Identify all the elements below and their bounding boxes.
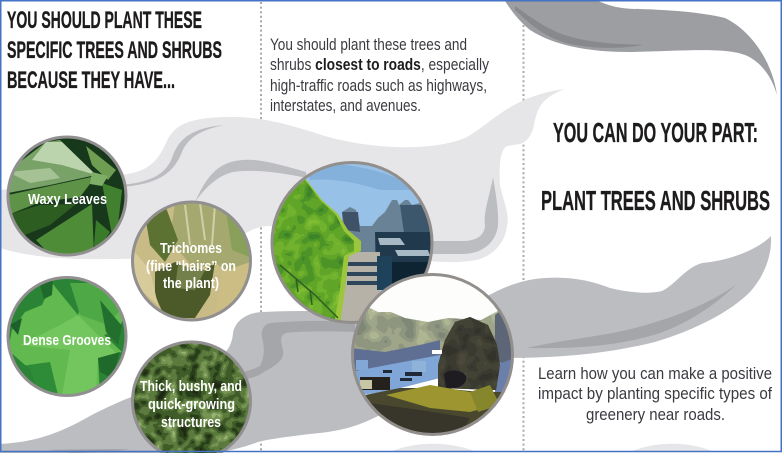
circle: thick bushy structures [130,340,255,453]
panel dividers [261,2,524,452]
heading: left panel: BECAUSE THEY HAVE... [7,67,175,94]
lower-left grey swoosh [0,311,380,453]
top-right swoosh inner stripe [515,6,643,48]
lower-right swoosh inner stripe [527,284,737,348]
photo circle: street with greenery [268,160,435,330]
text block: closest to roads: You should plant these trees and [270,35,467,54]
circle: dense grooves [5,275,130,400]
label: thick bushy structures: Thick, bushy, and [140,378,242,395]
photo circle: highway with trees [350,272,515,437]
bottom light grey curves [390,444,714,452]
medium grey stripe: upper left [122,125,224,187]
label: dense grooves: Dense Grooves [23,332,111,349]
lower-right grey swoosh [480,236,771,358]
label: trichomes: Trichomes [160,240,222,257]
heading: left panel [7,7,222,94]
label: thick bushy structures [140,378,242,431]
medium grey stripe: right of road photo [425,177,498,254]
text block: learn how: greenery near roads. [586,405,725,424]
label: waxy leaves: Waxy Leaves [28,191,107,208]
text block: closest to roads: interstates, and avenues. [270,96,421,115]
label: trichomes: the plant) [163,275,219,292]
circle: waxy leaves [5,135,130,260]
lower-left swoosh bottom stripe [48,449,130,453]
lower-left swoosh dark hook [240,321,355,380]
text block: learn how [538,364,772,424]
medium grey stripe: towards road photo [195,160,306,202]
label: thick bushy structures: structures [161,414,221,431]
text block: closest to roads [270,35,489,115]
text block: closest to roads: high-traffic roads such as highways, [270,76,487,95]
label: trichomes [146,240,236,292]
text block: closest to roads: shrubs closest to roads, especially [270,55,489,74]
heading: left panel: SPECIFIC TREES AND SHRUBS [7,37,222,64]
label: trichomes: (fine “hairs” on [146,258,236,275]
circle: trichomes [130,200,255,325]
label: thick bushy structures: quick-growing [148,396,235,413]
top-right dark grey swoosh [505,1,777,95]
light grey smoke swoosh [0,89,565,262]
heading: left panel: YOU SHOULD PLANT THESE [7,7,202,34]
